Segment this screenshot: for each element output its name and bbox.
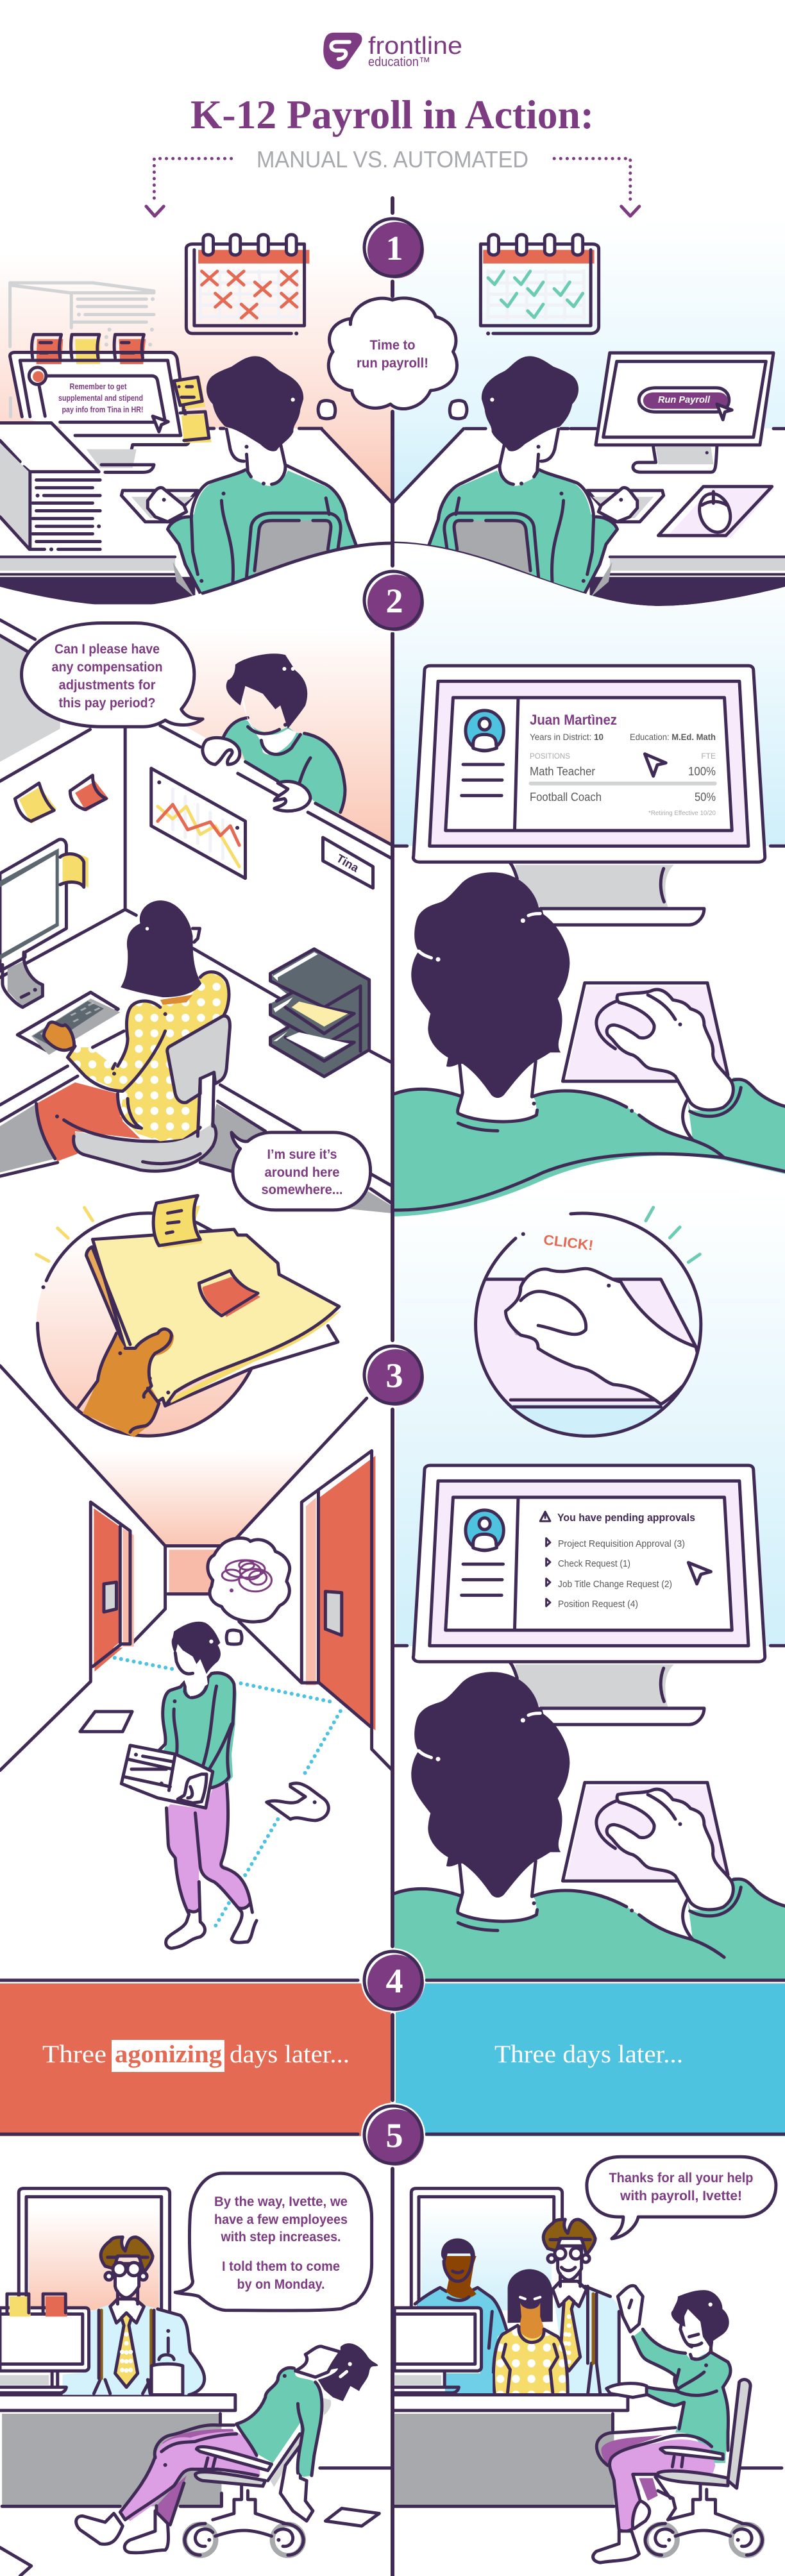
screen text: Juan Martinez employee record: Juan Martìnez bbox=[530, 712, 617, 728]
title: K-12 Payroll in Action: bbox=[190, 92, 594, 137]
illustration: monitor, worker from behind and mouse, step 2 right bbox=[394, 666, 785, 1140]
speech: thanks for all your help bbox=[587, 2157, 776, 2239]
icons: warning triangle, list arrows, cursor on approvals screen bbox=[540, 1511, 711, 1606]
wave line: teal wave lower edge, step 2 bbox=[394, 1154, 785, 1210]
screen text: Juan Martinez employee record: FTE bbox=[701, 752, 716, 761]
screen text: Juan Martinez employee record: POSITIONS bbox=[530, 752, 570, 761]
speech: thanks for all your help: Thanks for all your help bbox=[609, 2171, 753, 2185]
panel: step 3 manual, magnifier with folder in hand bbox=[37, 1195, 341, 1437]
number badge 4: 4 bbox=[386, 1962, 403, 2000]
panel: step 1 automated, monitor and mouse: Run Payroll bbox=[658, 394, 711, 405]
character: worker from behind at desk, step 1 right bbox=[428, 356, 785, 612]
speech: can I please have compensation adjustments bbox=[22, 623, 203, 727]
subtitle: MANUAL VS. AUTOMATED bbox=[257, 146, 528, 173]
speech: can I please have compensation adjustments: any compensation bbox=[51, 660, 163, 675]
arrow: dotted arrow to automated side bbox=[554, 158, 639, 216]
logo: frontline education: education™ bbox=[368, 55, 430, 69]
speech: by the way Ivette: with step increases. bbox=[221, 2230, 341, 2244]
body: teal shirt, step 3 right bbox=[394, 1877, 785, 1980]
panel: step 3 manual, hallway and walking woman bbox=[0, 1366, 393, 1948]
speech: I'm sure it's around here somewhere bbox=[232, 1132, 371, 1210]
speech: by the way Ivette: by on Monday. bbox=[237, 2277, 325, 2292]
text: three agonizing days later: days later... bbox=[230, 2041, 350, 2068]
screen text: Juan Martinez employee record: *Retiring Effective 10/20 bbox=[648, 810, 716, 817]
logo: frontline education: frontline bbox=[368, 33, 462, 60]
number badge 4 bbox=[361, 1948, 425, 2012]
panel: step 2 manual cubicle walls bbox=[0, 620, 393, 1063]
speech: thought cloud time to run payroll bbox=[328, 298, 457, 409]
room: window and desk step 5 right bbox=[394, 2189, 614, 2506]
panel backgrounds: gradients for step 1 bbox=[0, 218, 785, 503]
speech: by the way Ivette: By the way, Ivette, we bbox=[214, 2194, 348, 2209]
speech: thought cloud time to run payroll: run payroll! bbox=[357, 356, 428, 371]
wave: white hill divider between step 1 and step 2 bbox=[0, 543, 785, 648]
window gradient, manual bbox=[29, 2200, 159, 2311]
text: three agonizing days later: Three bbox=[42, 2041, 106, 2068]
speech: by the way Ivette: have a few employees bbox=[214, 2212, 348, 2227]
screen text: pending approvals list: Position Request (4) bbox=[558, 1599, 638, 1610]
icon: small thought bubble left bbox=[318, 401, 335, 419]
panel: step 3 automated, magnifier click on mouse bbox=[476, 1208, 701, 1442]
note text: reminder on monitor: Remember to get bbox=[69, 382, 127, 391]
character: manager with tie at desk bbox=[63, 2237, 205, 2395]
icon: computer monitor, step 5 right bbox=[394, 2308, 628, 2411]
speech: can I please have compensation adjustments: Can I please have bbox=[55, 642, 160, 657]
number badge 2: 2 bbox=[386, 582, 403, 620]
speech: thought cloud time to run payroll: Time to bbox=[369, 338, 416, 353]
speech: by the way Ivette bbox=[175, 2173, 372, 2311]
character: Ivette happily waving in chair, step 5 right bbox=[593, 2286, 782, 2563]
screen text: pending approvals list: Project Requisition Approval (3) bbox=[558, 1538, 685, 1549]
nameplate text Tina: Tina bbox=[334, 852, 362, 875]
screen: divider bar and cursor bbox=[530, 754, 715, 784]
screen text: pending approvals list: Job Title Change Request (2) bbox=[558, 1579, 672, 1590]
number badge 2 bbox=[361, 568, 425, 632]
text: three agonizing days later: agonizing bbox=[115, 2041, 223, 2068]
icon: small thought bubble right bbox=[450, 401, 467, 419]
screen text: Juan Martinez employee record: 100% bbox=[688, 765, 716, 778]
room: shared window, monitor and desk step 5 left bbox=[0, 2189, 235, 2506]
speech: can I please have compensation adjustments: this pay period? bbox=[59, 696, 155, 711]
speech: by the way Ivette: I told them to come bbox=[222, 2259, 340, 2274]
panel: step 1 manual, desk and paperwork bbox=[0, 283, 322, 550]
arrow: dotted arrow to manual side bbox=[146, 158, 232, 216]
icon: mugs and computer monitor, step 5 left bbox=[0, 2294, 89, 2393]
speech: I'm sure it's around here somewhere: I’m sure it’s bbox=[267, 1147, 337, 1162]
screen text: Juan Martinez employee record: Education: M.Ed. Math bbox=[630, 732, 716, 742]
screen text: pending approvals list: Check Request (1) bbox=[558, 1558, 630, 1569]
text: three agonizing days later bbox=[42, 2040, 350, 2072]
screen text: pending approvals list bbox=[557, 1511, 695, 1610]
number badge 5 bbox=[361, 2103, 425, 2167]
hallway gradient ceiling bbox=[67, 1441, 325, 1546]
characters: coworker, woman and manager behind desk, step 5 right bbox=[415, 2219, 620, 2395]
calendar: completed dates with check marks bbox=[480, 235, 599, 333]
number badge 3: 3 bbox=[386, 1356, 403, 1395]
screen text: Juan Martinez employee record: 50% bbox=[695, 791, 716, 804]
speech: I'm sure it's around here somewhere: around here bbox=[264, 1165, 340, 1180]
number badge 1 bbox=[361, 215, 425, 280]
text: three days later: Three days later... bbox=[494, 2041, 683, 2068]
number badge 3 bbox=[361, 1343, 425, 1407]
calendar: missed dates with x marks bbox=[186, 235, 309, 333]
step 4 bands: manual red and automated blue bbox=[0, 1980, 785, 2136]
character: Ivette at cubicle desk bbox=[0, 839, 393, 1213]
speech: thanks for all your help: with payroll, Ivette! bbox=[620, 2189, 742, 2203]
screen text: pending approvals list: You have pending approvals bbox=[557, 1511, 695, 1524]
center timeline line bbox=[391, 198, 394, 2576]
screen text: Juan Martinez employee record: Years in District: 10 bbox=[530, 732, 604, 742]
note text: reminder on monitor bbox=[58, 382, 144, 414]
note text: reminder on monitor: supplemental and stipend bbox=[58, 393, 143, 403]
panel: step 1 automated, monitor and mouse bbox=[466, 353, 785, 538]
screen text: Juan Martinez employee record: Math Teacher bbox=[530, 765, 595, 778]
illustration: monitor, worker from behind and mouse, step 3 right bbox=[394, 1465, 785, 1940]
speech: I'm sure it's around here somewhere: somewhere... bbox=[262, 1183, 342, 1197]
note text: reminder on monitor: pay info from Tina in HR! bbox=[62, 405, 144, 414]
screen text: Juan Martinez employee record: Football Coach bbox=[530, 791, 602, 804]
text: click: CLICK! bbox=[543, 1231, 595, 1254]
speech: can I please have compensation adjustments: adjustments for bbox=[59, 678, 155, 693]
panel backgrounds: gradients for step 2 and step 3 bbox=[0, 543, 785, 1646]
logo: frontline education bbox=[323, 33, 462, 69]
character: Ivette slumped in chair, step 5 left bbox=[0, 2343, 391, 2576]
body: teal shirt, step 2 right bbox=[394, 1077, 785, 1216]
character: worker from behind at desk, step 1 left bbox=[0, 356, 357, 612]
number badge 5: 5 bbox=[386, 2116, 403, 2155]
screen text: Juan Martinez employee record bbox=[530, 712, 716, 817]
number badge 1: 1 bbox=[386, 229, 403, 267]
